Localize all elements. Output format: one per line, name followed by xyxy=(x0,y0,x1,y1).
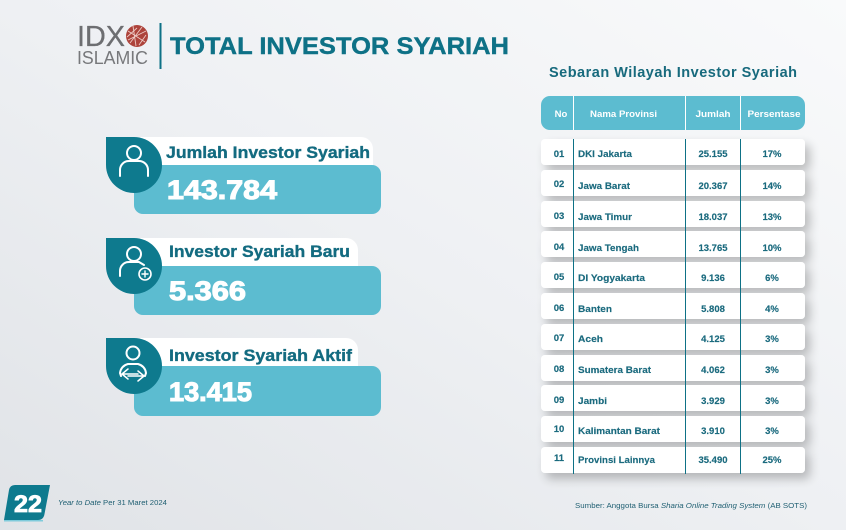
title divider xyxy=(160,23,162,69)
footnote: source: Sumber: Anggota Bursa Sharia Online Trading System (AB SOTS) xyxy=(575,501,808,510)
card: Investor Syariah Aktif xyxy=(106,338,381,416)
row 04: 10% xyxy=(762,243,782,254)
row 05: 6% xyxy=(765,273,779,284)
row 03 xyxy=(554,211,782,223)
card: Jumlah Investor Syariah xyxy=(106,137,381,214)
row 11: 35.490 xyxy=(698,455,728,466)
value: 13.415: 13.415 xyxy=(169,377,252,407)
row 08: 3% xyxy=(765,365,779,376)
logo: IDX Islamic: IDX xyxy=(77,21,125,53)
page number badge: 22 xyxy=(14,491,42,518)
row 09: Jambi xyxy=(578,396,607,407)
row 11: 25% xyxy=(762,455,782,466)
row 06 xyxy=(554,303,779,315)
row 10: 3.910 xyxy=(701,426,725,437)
table heading: Sebaran Wilayah Investor Syariah xyxy=(549,65,797,81)
row 01 xyxy=(554,149,782,160)
row backgrounds xyxy=(541,139,805,473)
row 10 xyxy=(554,424,779,437)
footnote: period: Year to Date Per 31 Maret 2024 xyxy=(58,498,167,507)
row 04: 04 xyxy=(554,242,565,253)
row 07: Aceh xyxy=(578,334,603,345)
row 04 xyxy=(554,242,782,254)
row 04: Jawa Tengah xyxy=(578,243,639,254)
row 09: 3.929 xyxy=(701,396,725,407)
row 08: 08 xyxy=(554,364,564,375)
row 08: 4.062 xyxy=(701,365,725,376)
row 08 xyxy=(554,364,779,376)
row 03: 03 xyxy=(554,211,564,222)
row 02: 02 xyxy=(554,179,564,190)
row 01: 01 xyxy=(554,149,565,160)
row 11: 11 xyxy=(554,453,565,464)
row 03: Jawa Timur xyxy=(578,212,632,223)
row 05: 05 xyxy=(554,272,565,283)
row 03: 18.037 xyxy=(698,212,728,223)
row 03: 13% xyxy=(762,212,782,223)
table header: Nama Provinsi xyxy=(590,109,657,120)
row 09: 3% xyxy=(765,396,779,407)
row 07: 4.125 xyxy=(701,334,726,345)
row 11: Provinsi Lainnya xyxy=(578,455,656,466)
row 02 xyxy=(554,179,782,192)
card: Investor Syariah Baru xyxy=(106,238,381,315)
row 10: Kalimantan Barat xyxy=(578,426,661,437)
row 06: 4% xyxy=(765,304,779,315)
row 07: 3% xyxy=(765,334,779,345)
label: Investor Syariah Aktif: Investor Syariah Aktif xyxy=(169,346,352,365)
row 06: 5.808 xyxy=(701,304,725,315)
page number badge xyxy=(4,485,50,522)
row 09: 09 xyxy=(554,395,564,406)
row 05 xyxy=(554,272,779,284)
row 02: 14% xyxy=(762,181,782,192)
icon: person with exchange arrows xyxy=(120,346,146,381)
table rows xyxy=(541,139,805,474)
row 10: 3% xyxy=(765,426,779,437)
icon: person xyxy=(120,146,148,176)
row 05: 9.136 xyxy=(701,273,725,284)
table header: No xyxy=(555,109,568,120)
table header: Jumlah xyxy=(696,109,731,120)
row 01: 17% xyxy=(762,149,782,160)
row 02: 20.367 xyxy=(698,181,728,192)
icon: person with plus xyxy=(120,247,151,280)
row 02: Jawa Barat xyxy=(578,181,631,192)
logo: IDX Islamic: ISLAMIC xyxy=(77,48,148,68)
row 04: 13.765 xyxy=(698,243,728,254)
row 05: DI Yogyakarta xyxy=(578,273,646,284)
row 08: Sumatera Barat xyxy=(578,365,652,376)
row 10: 10 xyxy=(554,424,564,435)
table header xyxy=(541,96,805,130)
row 06: Banten xyxy=(578,304,612,315)
row 07: 07 xyxy=(554,333,564,344)
row 01: DKI Jakarta xyxy=(578,149,633,160)
value: 5.366: 5.366 xyxy=(169,276,246,306)
label: Investor Syariah Baru: Investor Syariah Baru xyxy=(169,242,350,261)
label: Jumlah Investor Syariah: Jumlah Investor Syariah xyxy=(166,143,370,162)
row 07 xyxy=(554,333,779,345)
row 11 xyxy=(554,453,782,466)
row 01: 25.155 xyxy=(698,149,728,160)
row 09 xyxy=(554,395,779,407)
logo: IDX Islamic xyxy=(77,21,148,68)
row 06: 06 xyxy=(554,303,564,314)
value: 143.784: 143.784 xyxy=(167,175,277,205)
table header: Persentase xyxy=(748,109,800,120)
title: TOTAL INVESTOR SYARIAH xyxy=(170,33,509,60)
